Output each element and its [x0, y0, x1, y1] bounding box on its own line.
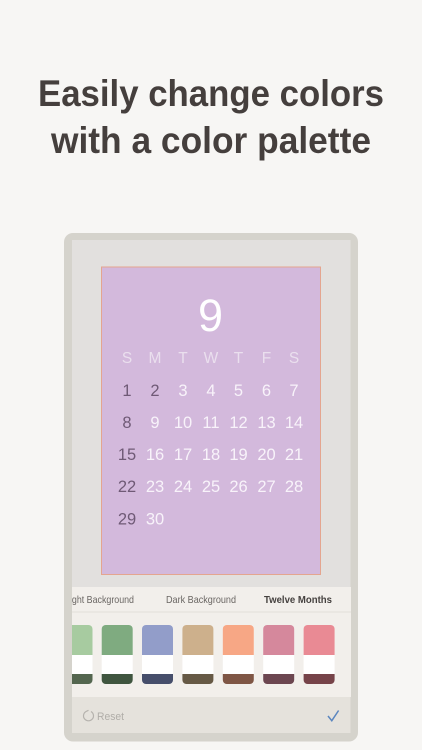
swatch: blue	[142, 625, 173, 684]
date grid: 3	[178, 382, 188, 400]
date grid: 29	[118, 510, 136, 528]
month number: 9	[198, 290, 223, 341]
swatch: pink red	[304, 625, 335, 684]
date grid: 7	[289, 382, 299, 400]
date grid: 24	[174, 478, 192, 496]
swatch: green light	[72, 625, 92, 684]
title: with a color palette	[50, 120, 371, 161]
icon: check mark	[328, 710, 339, 721]
bottom toolbar	[72, 697, 350, 733]
weekday headers: S	[122, 350, 132, 367]
weekday headers: W	[204, 350, 219, 367]
date grid: 23	[146, 478, 164, 496]
date grid: 19	[229, 446, 248, 464]
title	[38, 73, 384, 161]
weekday headers: S	[289, 350, 299, 367]
date grid: 20	[257, 446, 276, 464]
date grid: 8	[122, 414, 132, 432]
date grid: 11	[202, 414, 220, 432]
swatch: tan	[182, 625, 213, 684]
swatch: green	[102, 625, 133, 684]
date grid: 2	[150, 382, 160, 400]
icon: reset	[84, 710, 94, 721]
reset label: Reset	[97, 711, 124, 723]
weekday headers: T	[178, 350, 188, 367]
weekday headers	[122, 350, 299, 367]
weekday headers: F	[262, 350, 271, 367]
date grid: 22	[118, 478, 136, 496]
date grid: 12	[229, 414, 248, 432]
calendar page	[102, 267, 320, 574]
date grid: 16	[146, 446, 164, 464]
date grid: 21	[285, 446, 303, 464]
swatch: orange	[223, 625, 254, 684]
date grid: 15	[118, 446, 136, 464]
date grid: 18	[202, 446, 220, 464]
palette panel	[62, 587, 351, 697]
date grid: 4	[206, 382, 216, 400]
date grid: 25	[202, 478, 220, 496]
date grid: 6	[262, 382, 271, 400]
date grid: 26	[229, 478, 248, 496]
palette tabs: Dark Background	[166, 594, 236, 606]
weekday headers: T	[234, 350, 244, 367]
date grid	[118, 382, 303, 528]
date grid: 27	[257, 478, 276, 496]
title: Easily change colors	[38, 73, 384, 114]
device frame	[62, 233, 358, 742]
date grid: 10	[174, 414, 192, 432]
date grid: 9	[150, 414, 160, 432]
date grid: 1	[122, 382, 132, 400]
date grid: 30	[146, 510, 164, 528]
palette tabs: Twelve Months	[264, 594, 332, 606]
palette tabs: Light Background	[65, 594, 134, 606]
swatch: rose	[263, 625, 294, 684]
date grid: 13	[257, 414, 276, 432]
weekday headers: M	[149, 350, 161, 367]
date grid: 17	[174, 446, 192, 464]
date grid: 14	[285, 414, 303, 432]
date grid: 28	[285, 478, 303, 496]
date grid: 5	[234, 382, 243, 400]
palette tabs	[72, 596, 332, 605]
